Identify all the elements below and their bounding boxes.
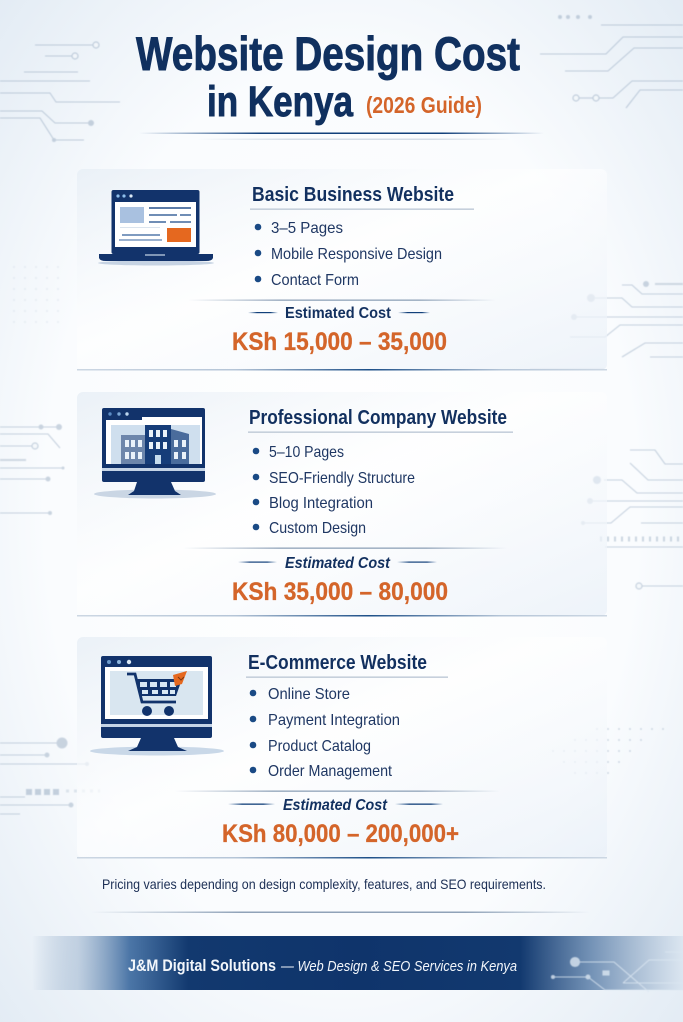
price: KSh 80,000 – 200,000+ bbox=[222, 820, 459, 848]
price: KSh 35,000 – 80,000 bbox=[232, 578, 448, 606]
title underline bbox=[139, 132, 544, 140]
panel: professional company website bbox=[77, 392, 607, 616]
heading: Professional Company Website bbox=[249, 407, 507, 429]
panel: e-commerce website bbox=[77, 637, 607, 858]
feature list bbox=[255, 220, 442, 289]
feature list: Blog Integration bbox=[269, 495, 373, 512]
footnote: Pricing varies depending on design complexity, features, and SEO requirements. bbox=[102, 876, 546, 892]
title: (2026 Guide) bbox=[366, 92, 482, 118]
footer band: — Web Design & SEO Services in Kenya bbox=[280, 958, 517, 975]
icon: monitor with shopping cart bbox=[90, 656, 224, 756]
title: Website Design Cost bbox=[136, 27, 520, 80]
circuit decoration: top right bbox=[540, 15, 683, 108]
feature list: SEO-Friendly Structure bbox=[269, 470, 415, 487]
dot grid: left bbox=[8, 262, 63, 324]
feature list: Product Catalog bbox=[268, 738, 371, 755]
feature list: Contact Form bbox=[271, 272, 359, 289]
feature list: Payment Integration bbox=[268, 712, 400, 729]
circuit decoration: lower left bbox=[0, 738, 100, 814]
circuit decoration: top left bbox=[0, 42, 120, 142]
icon: monitor with office building bbox=[94, 408, 216, 498]
footer circuit bbox=[552, 952, 683, 992]
heading: E-Commerce Website bbox=[248, 652, 427, 674]
estimated cost: Estimated Cost bbox=[283, 797, 388, 814]
feature list bbox=[253, 444, 415, 537]
feature list bbox=[250, 686, 400, 780]
feature list: Custom Design bbox=[269, 520, 366, 537]
estimated cost: Estimated Cost bbox=[285, 305, 391, 322]
dot grid: lower right bbox=[550, 728, 665, 778]
price: KSh 15,000 – 35,000 bbox=[232, 328, 447, 356]
footer band bbox=[32, 936, 683, 992]
feature list: 5–10 Pages bbox=[269, 444, 344, 461]
feature list: Mobile Responsive Design bbox=[271, 246, 442, 263]
estimated cost: Estimated Cost bbox=[285, 555, 391, 572]
circuit decoration: middle left bbox=[0, 424, 64, 515]
feature list: 3–5 Pages bbox=[271, 220, 343, 237]
title bbox=[136, 27, 520, 126]
title: in Kenya bbox=[207, 78, 354, 126]
panel: basic business website bbox=[77, 169, 607, 370]
feature list: Online Store bbox=[268, 686, 350, 703]
footer band: J&M Digital Solutions bbox=[128, 957, 276, 975]
feature list: Order Management bbox=[268, 763, 392, 780]
heading: Basic Business Website bbox=[252, 184, 454, 206]
icon: laptop bbox=[98, 190, 214, 266]
circuit decoration: middle right bbox=[530, 281, 683, 589]
